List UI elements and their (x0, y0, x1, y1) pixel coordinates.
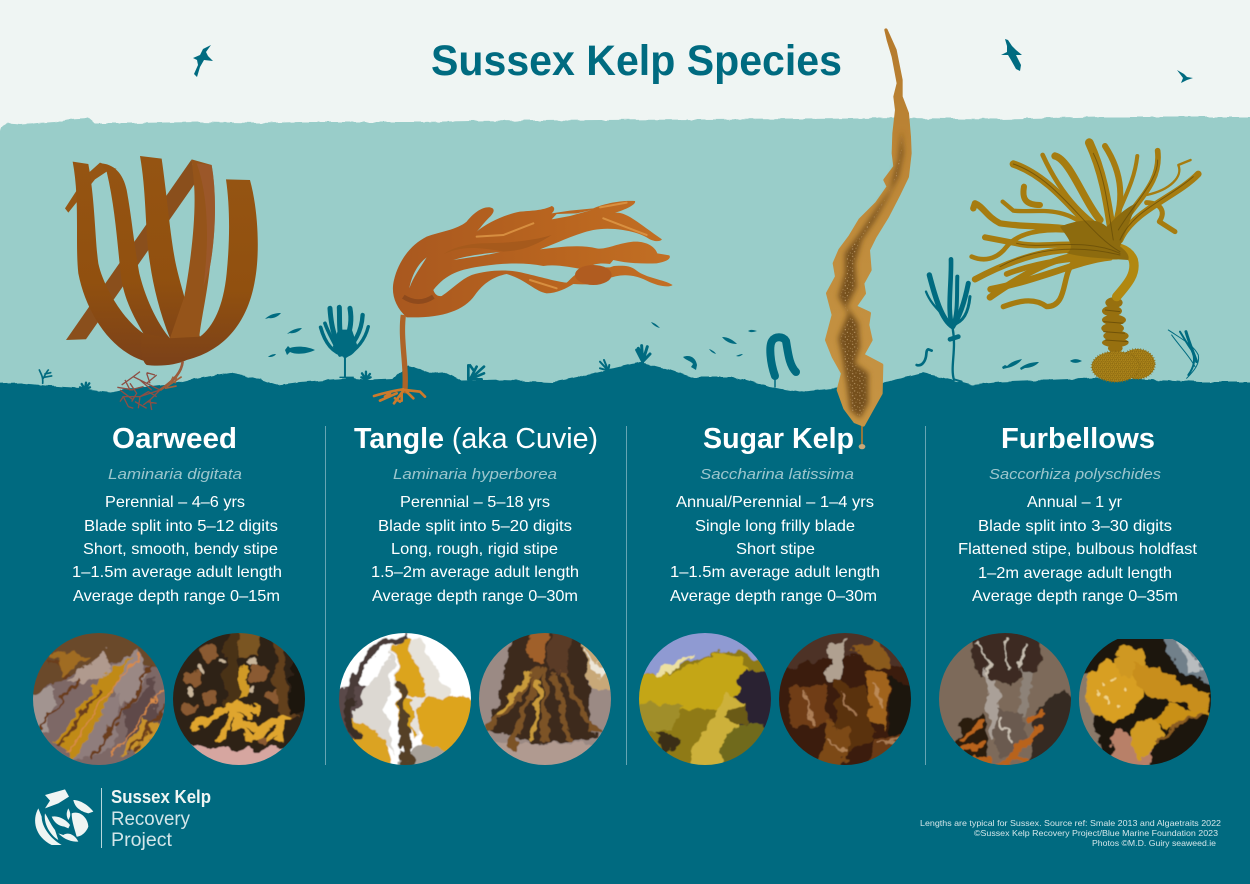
heading: Sugar Kelp (703, 423, 854, 455)
panel: oarweed (72, 423, 282, 605)
panel: tangle (354, 423, 598, 605)
sky background (0, 0, 1250, 140)
footer credits: Photos ©M.D. Guiry seaweed.ie (1092, 838, 1216, 848)
facts: Single long frilly blade (695, 518, 855, 535)
water background (0, 117, 1250, 400)
footer credits: ©Sussex Kelp Recovery Project/Blue Marine Foundation 2023 (974, 828, 1218, 838)
facts: Perennial – 5–18 yrs (400, 494, 550, 511)
facts (72, 494, 282, 605)
facts: Average depth range 0–15m (73, 588, 280, 605)
facts: Blade split into 3–30 digits (978, 518, 1172, 535)
thin seaweed silhouette far right (1168, 330, 1199, 378)
photo: sugar kelp under water (639, 633, 771, 765)
panel: sugar kelp (670, 423, 880, 605)
facts: Blade split into 5–12 digits (84, 518, 278, 535)
logo wordmark: Project (111, 830, 173, 851)
scientific name: Saccharina latissima (700, 466, 854, 483)
facts: Average depth range 0–30m (670, 588, 877, 605)
sea floor (0, 362, 1250, 884)
facts: Flattened stipe, bulbous holdfast (958, 541, 1198, 558)
facts: Short stipe (736, 541, 815, 558)
facts: Long, rough, rigid stipe (391, 541, 558, 558)
facts: 1–1.5m average adult length (72, 564, 282, 581)
facts: Short, smooth, bendy stipe (83, 541, 278, 558)
fish group right (1002, 359, 1082, 370)
facts: 1–2m average adult length (978, 565, 1172, 582)
holdfast bulb (1120, 349, 1155, 379)
icon: bird left (193, 45, 213, 77)
logo wordmark (111, 787, 211, 851)
long-bladed seaweed silhouette (770, 337, 796, 387)
heading: Furbellows (1001, 423, 1155, 455)
facts: Blade split into 5–20 digits (378, 518, 572, 535)
photo: tangle blades (339, 633, 471, 765)
holdfast (374, 389, 425, 403)
icon: kelp and fish roundel (35, 789, 93, 845)
background silhouettes: fish and seaweed (39, 259, 1199, 389)
illustration: oarweed (65, 156, 258, 410)
illustration: tangle (374, 201, 673, 403)
fish shoal left (265, 313, 315, 357)
section dividers (326, 426, 926, 765)
facts: Average depth range 0–30m (372, 588, 578, 605)
panel: furbellows (958, 423, 1198, 605)
footer credits: Lengths are typical for Sussex. Source ref: Smale 2013 and Algaetraits 2022 (920, 818, 1221, 828)
illustration: sugar kelp (827, 30, 910, 449)
photo: oarweed blades (33, 633, 165, 765)
seaweed silhouette right (926, 259, 970, 382)
logo (35, 787, 211, 851)
footer credits (920, 818, 1221, 848)
scientific name: Saccorhiza polyschides (989, 466, 1162, 483)
illustration: furbellows (972, 143, 1198, 382)
icon: bird right (1177, 70, 1193, 83)
logo divider (100, 788, 102, 848)
fish shoal centre (651, 322, 757, 370)
seahorse (917, 349, 932, 365)
scientific name: Laminaria hyperborea (393, 466, 557, 483)
facts: 1–1.5m average adult length (670, 564, 880, 581)
icon: bird middle (1001, 39, 1022, 71)
facts (958, 494, 1198, 605)
seaweed silhouette left (321, 307, 368, 377)
stipe frill (1101, 297, 1129, 352)
facts (371, 494, 579, 605)
photo: furbellows blades (939, 633, 1071, 765)
facts (670, 494, 880, 605)
holdfast (117, 372, 182, 410)
small seaweeds on floor (39, 370, 371, 389)
scientific name: Laminaria digitata (108, 466, 242, 483)
facts: Annual/Perennial – 1–4 yrs (676, 494, 874, 511)
gaps between blades (409, 210, 617, 296)
facts: Annual – 1 yr (1027, 494, 1123, 511)
heading: Tangle (aka Cuvie) (354, 423, 598, 455)
logo wordmark: Recovery (111, 809, 190, 830)
photo: oarweed holdfasts (173, 633, 305, 765)
photo: sugar kelp blades (779, 633, 911, 765)
heading: Oarweed (112, 423, 237, 455)
photo: furbellows holdfast (1079, 639, 1211, 765)
photo: tangle holdfast (479, 633, 611, 765)
facts: Perennial – 4–6 yrs (105, 494, 245, 511)
facts: 1.5–2m average adult length (371, 564, 579, 581)
facts: Average depth range 0–35m (972, 588, 1178, 605)
title: Sussex Kelp Species (431, 37, 842, 85)
birds (193, 39, 1193, 83)
logo wordmark: Sussex Kelp (111, 787, 211, 807)
